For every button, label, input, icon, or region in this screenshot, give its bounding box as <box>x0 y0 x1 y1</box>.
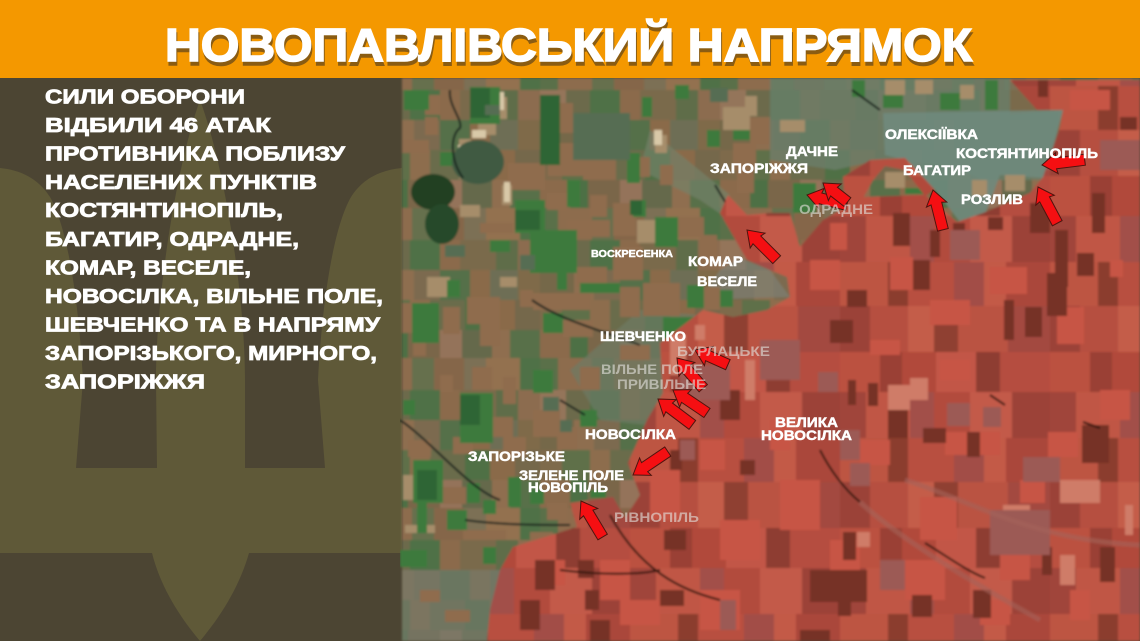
map labels: settlements: ОДРАДНЕ <box>799 201 873 217</box>
map labels: settlements: НОВОСІЛКА <box>761 427 852 443</box>
map labels: settlements: ВІЛЬНЕ ПОЛЕ <box>601 361 703 377</box>
text block: summary of attacks: ШЕВЧЕНКО ТА В НАПРЯМУ <box>45 314 381 336</box>
text block: summary of attacks: БАГАТИР, ОДРАДНЕ, <box>45 229 299 251</box>
dark forest <box>411 174 455 210</box>
map base: farmland <box>402 78 1140 641</box>
title: НОВОПАВЛІВСЬКИЙ НАПРЯМОК <box>165 19 973 71</box>
text block: summary of attacks: ЗАПОРІЗЬКОГО, МИРНОГО, <box>45 343 377 365</box>
text block: summary of attacks: КОМАР, ВЕСЕЛЕ, <box>45 258 251 280</box>
header bar <box>0 0 1140 78</box>
tan fields <box>403 80 1025 533</box>
occupied area: red overlay with fields <box>486 78 1140 641</box>
rivers <box>400 90 880 525</box>
text block: summary of attacks <box>45 86 383 394</box>
text block: summary of attacks: ВІДБИЛИ 46 АТАК <box>45 115 272 137</box>
map labels: settlements: ПРИВІЛЬНЕ <box>617 376 706 392</box>
map labels: settlements: КОСТЯНТИНОПІЛЬ <box>956 145 1098 161</box>
map labels: settlements: ЗАПОРІЗЬКЕ <box>468 448 565 464</box>
map labels: settlements: ЗЕЛЕНЕ ПОЛЕ <box>519 467 624 483</box>
map labels: settlements <box>468 126 1098 525</box>
text block: summary of attacks: СИЛИ ОБОРОНИ <box>45 86 245 108</box>
map labels: settlements: БУРЛАЦЬКЕ <box>677 343 770 359</box>
map labels: settlements: ВОСКРЕСЕНКА <box>591 248 673 260</box>
map labels: settlements: ШЕВЧЕНКО <box>600 328 686 344</box>
arrows: attack directions <box>572 149 1086 542</box>
map labels: settlements: БАГАТИР <box>903 162 971 178</box>
green fields <box>400 80 998 567</box>
icon: trident emblem <box>0 100 402 641</box>
map labels: settlements: ДАЧНЕ <box>786 143 838 159</box>
creeks in occupied area <box>560 395 1100 600</box>
title: НОВОПАВЛІВСЬКИЙ НАПРЯМОК <box>166 23 974 75</box>
map: satellite base and occupied area <box>400 78 1140 641</box>
panel: left text panel with trident <box>0 78 402 641</box>
map labels: settlements: РІВНОПІЛЬ <box>614 509 699 525</box>
map labels: settlements: ВЕЛИКА <box>775 414 838 430</box>
map labels: settlements: ВЕСЕЛЕ <box>697 273 757 289</box>
map labels: settlements: ОЛЕКСІЇВКА <box>885 126 978 142</box>
map labels: settlements: РОЗЛИВ <box>961 191 1023 207</box>
bright red fields <box>540 90 1130 630</box>
map labels: settlements: ЗАПОРІЖЖЯ <box>710 160 808 176</box>
dull purple-red fields <box>680 130 1140 630</box>
light fields <box>670 325 1133 585</box>
map labels: settlements: НОВОПІЛЬ <box>528 479 608 495</box>
map labels: settlements: НОВОСІЛКА <box>585 426 676 442</box>
text block: summary of attacks: ЗАПОРІЖЖЯ <box>45 372 205 394</box>
text block: summary of attacks: КОСТЯНТИНОПІЛЬ, <box>45 200 283 222</box>
text block: summary of attacks: ПРОТИВНИКА ПОБЛИЗУ <box>45 144 346 166</box>
map labels: settlements: КОМАР <box>688 253 743 269</box>
text block: summary of attacks: НОВОСІЛКА, ВІЛЬНЕ ПОЛЕ, <box>45 286 383 308</box>
brown fields <box>402 95 770 622</box>
text block: summary of attacks: НАСЕЛЕНИХ ПУНКТІВ <box>45 172 317 194</box>
grey-green settlement belts <box>770 78 1063 180</box>
dark fields <box>520 80 1137 641</box>
